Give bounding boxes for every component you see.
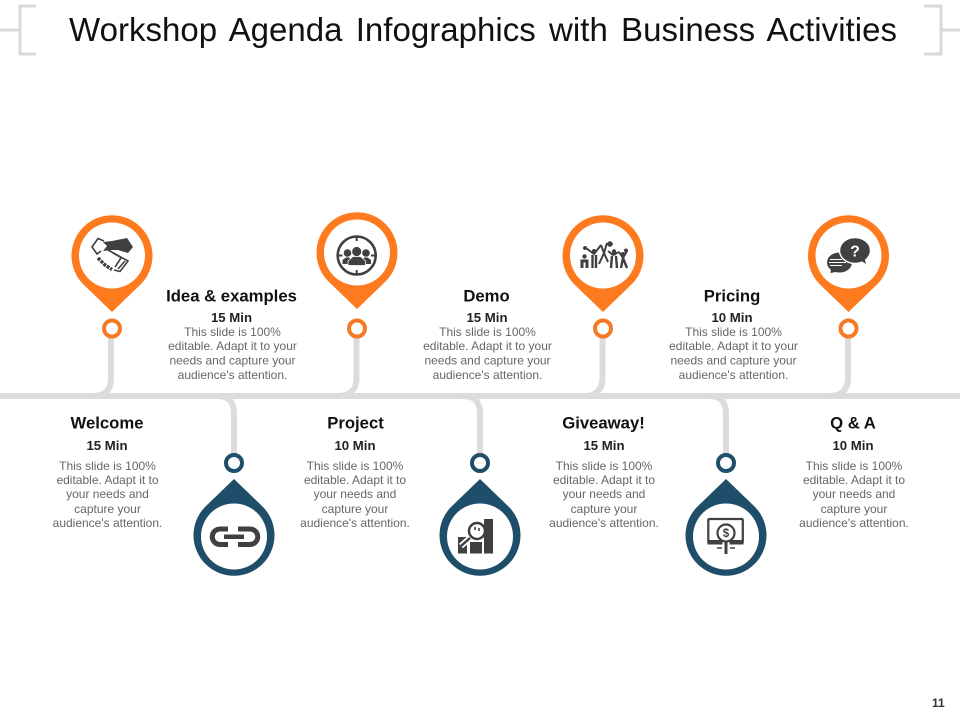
text block: Demo bbox=[423, 286, 552, 382]
text block: Idea & examples: Idea & examples bbox=[166, 286, 297, 306]
text block: Idea & examples: editable. Adapt it to your bbox=[168, 339, 297, 353]
text block: Demo: audience's attention. bbox=[433, 368, 542, 382]
text block: Project bbox=[300, 414, 410, 530]
text block: Giveaway!: your needs and bbox=[563, 487, 645, 501]
text block: Giveaway!: capture your bbox=[571, 502, 637, 516]
text block: Pricing: This slide is 100% bbox=[685, 325, 782, 339]
text block: Q & A: Q & A bbox=[830, 414, 876, 432]
drop 3: monitor with dollar bbox=[686, 455, 766, 576]
text block: Pricing bbox=[669, 286, 798, 382]
text block: Welcome: 15 Min bbox=[86, 438, 128, 453]
text block: Q & A: 10 Min bbox=[832, 438, 874, 453]
text block: Q & A bbox=[799, 414, 909, 530]
text block: Welcome: audience's attention. bbox=[53, 516, 162, 530]
page number: 11 bbox=[932, 696, 945, 710]
text block: Giveaway!: This slide is 100% bbox=[556, 459, 653, 473]
text block: Project: 10 Min bbox=[334, 438, 376, 453]
icon: crowd bbox=[582, 241, 628, 268]
text block: Demo: Demo bbox=[463, 286, 510, 306]
title bracket right bbox=[924, 6, 960, 54]
text block: Project: editable. Adapt it to bbox=[304, 473, 406, 487]
text block: Giveaway!: editable. Adapt it to bbox=[553, 473, 655, 487]
icon: bar chart and magnifier bbox=[458, 519, 493, 554]
text block: Welcome: editable. Adapt it to bbox=[56, 473, 159, 487]
drop 2: chart with magnifier bbox=[440, 455, 520, 576]
text block: Idea & examples bbox=[166, 286, 297, 382]
text block: Welcome: Welcome bbox=[71, 414, 143, 432]
text block: Demo: 15 Min bbox=[466, 310, 508, 325]
timeline connectors bbox=[0, 336, 960, 455]
drop 1: chain link bbox=[194, 455, 274, 576]
text block: Demo: This slide is 100% bbox=[439, 325, 536, 339]
icon: monitor and dollar: $ bbox=[723, 528, 730, 540]
text block: Q & A: capture your bbox=[821, 502, 887, 516]
icon: chain bbox=[212, 529, 258, 544]
pin 2: target audience bbox=[317, 212, 398, 336]
text block: Idea & examples: audience's attention. bbox=[178, 368, 287, 382]
icon: target with people bbox=[338, 236, 376, 275]
text block: Q & A: This slide is 100% bbox=[806, 459, 903, 473]
text block: Q & A: editable. Adapt it to bbox=[803, 473, 905, 487]
text block: Project: audience's attention. bbox=[300, 516, 410, 530]
pin 4: speech bubbles bbox=[808, 215, 889, 336]
text block: Pricing: 10 Min bbox=[711, 310, 753, 325]
icon: handshake bbox=[92, 238, 133, 272]
text block: Idea & examples: This slide is 100% bbox=[184, 325, 281, 339]
text block: Q & A: audience's attention. bbox=[799, 516, 909, 530]
text block: Idea & examples: needs and capture your bbox=[169, 354, 296, 368]
pin 1: handshake bbox=[72, 215, 152, 336]
text block: Idea & examples: 15 Min bbox=[211, 310, 252, 325]
icon: chat bubbles: ? bbox=[850, 244, 860, 260]
text block: Project: This slide is 100% bbox=[307, 459, 404, 473]
text block: Pricing: editable. Adapt it to your bbox=[669, 339, 798, 353]
text block: Welcome: This slide is 100% bbox=[59, 459, 156, 473]
title: Workshop Agenda Infographics with Business Activities bbox=[69, 11, 897, 48]
text block: Project: capture your bbox=[322, 502, 388, 516]
pin 3: celebrating crowd bbox=[563, 215, 644, 336]
text block: Welcome: capture your bbox=[74, 502, 141, 516]
text block: Pricing: needs and capture your bbox=[670, 354, 797, 368]
text block: Q & A: your needs and bbox=[813, 487, 895, 501]
text block: Pricing: audience's attention. bbox=[679, 368, 788, 382]
text block: Giveaway!: Giveaway! bbox=[562, 414, 645, 432]
text block: Demo: editable. Adapt it to your bbox=[423, 339, 552, 353]
text block: Project: your needs and bbox=[314, 487, 396, 501]
text block: Welcome: your needs and bbox=[66, 487, 149, 501]
text block: Giveaway!: audience's attention. bbox=[549, 516, 659, 530]
text block: Welcome bbox=[53, 414, 162, 530]
text block: Demo: needs and capture your bbox=[424, 354, 551, 368]
text block: Giveaway!: 15 Min bbox=[583, 438, 625, 453]
text block: Project: Project bbox=[327, 414, 384, 432]
title bracket left bbox=[0, 6, 36, 54]
text block: Pricing: Pricing bbox=[704, 286, 760, 306]
text block: Giveaway! bbox=[549, 414, 659, 530]
